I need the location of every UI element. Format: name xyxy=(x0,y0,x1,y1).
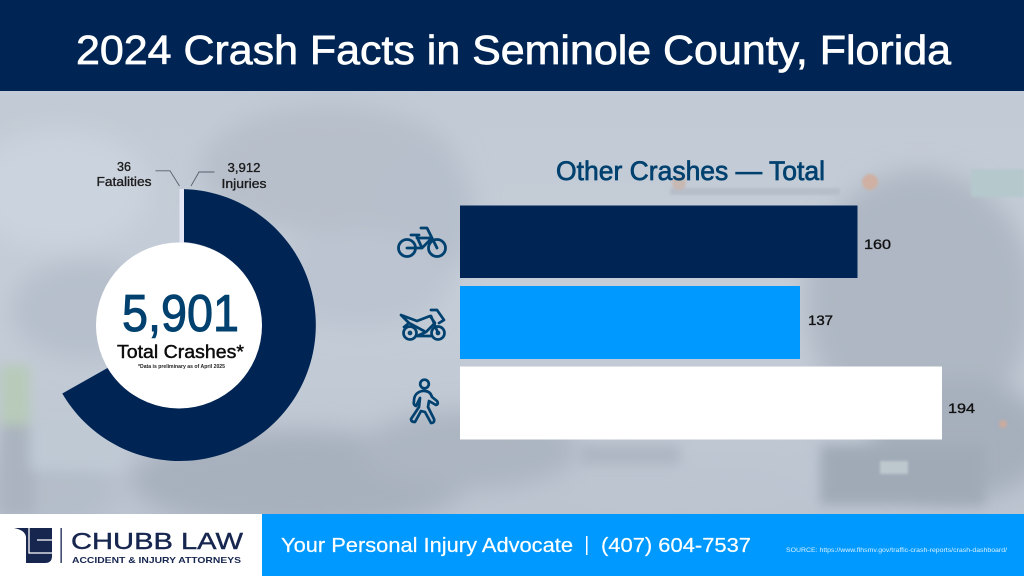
donut segment: fatalities sliver xyxy=(180,189,184,243)
donut center circle xyxy=(96,242,262,408)
footer xyxy=(0,514,1024,576)
total crashes label: Total Crashes* xyxy=(117,341,244,362)
callout: injuries: Injuries xyxy=(222,177,266,191)
bar: pedestrian 194 xyxy=(460,366,975,440)
source: SOURCE: https://www.flhsmv.gov/traffic-crash-reports/crash-dashboard/ xyxy=(786,548,1007,554)
callout: fatalities: 36 xyxy=(117,160,131,174)
logo divider xyxy=(60,528,62,563)
title banner xyxy=(0,0,1024,91)
icon: bicycle xyxy=(398,228,446,256)
bar: motorcycle 137 xyxy=(460,286,833,359)
callout: fatalities xyxy=(96,160,180,189)
phone number: (407) 604-7537 xyxy=(601,535,751,557)
logo tagline: ACCIDENT & INJURY ATTORNEYS xyxy=(72,555,241,565)
logo mark xyxy=(14,528,52,563)
bar: motorcycle 137: 137 xyxy=(808,312,833,328)
callout: fatalities: Fatalities xyxy=(96,175,152,189)
bar chart heading: Other Crashes — Total xyxy=(556,156,825,186)
bar chart: other crashes xyxy=(460,206,975,440)
tagline: Your Personal Injury Advocate xyxy=(281,535,573,557)
bar: pedestrian 194: 194 xyxy=(948,400,975,416)
donut chart: total crashes xyxy=(62,189,316,461)
donut segment: injuries xyxy=(62,189,316,461)
title: 2024 Crash Facts in Seminole County, Florida xyxy=(76,27,951,73)
footer logo panel xyxy=(0,514,262,576)
bar: bicycle 160 xyxy=(460,206,891,278)
callout: injuries xyxy=(191,161,266,191)
footer blue panel xyxy=(262,514,1024,576)
background: faded street crash photo xyxy=(0,90,1024,530)
logo name: CHUBB LAW xyxy=(71,528,244,554)
icon: motorcycle xyxy=(401,310,444,340)
separator xyxy=(586,536,588,555)
preliminary data note: *Data is preliminary as of April 2025 xyxy=(138,364,225,370)
bar: bicycle 160: 160 xyxy=(864,236,891,252)
total crashes number: 5,901 xyxy=(122,285,239,343)
callout: injuries: 3,912 xyxy=(228,161,261,175)
icon: pedestrian xyxy=(411,380,438,423)
